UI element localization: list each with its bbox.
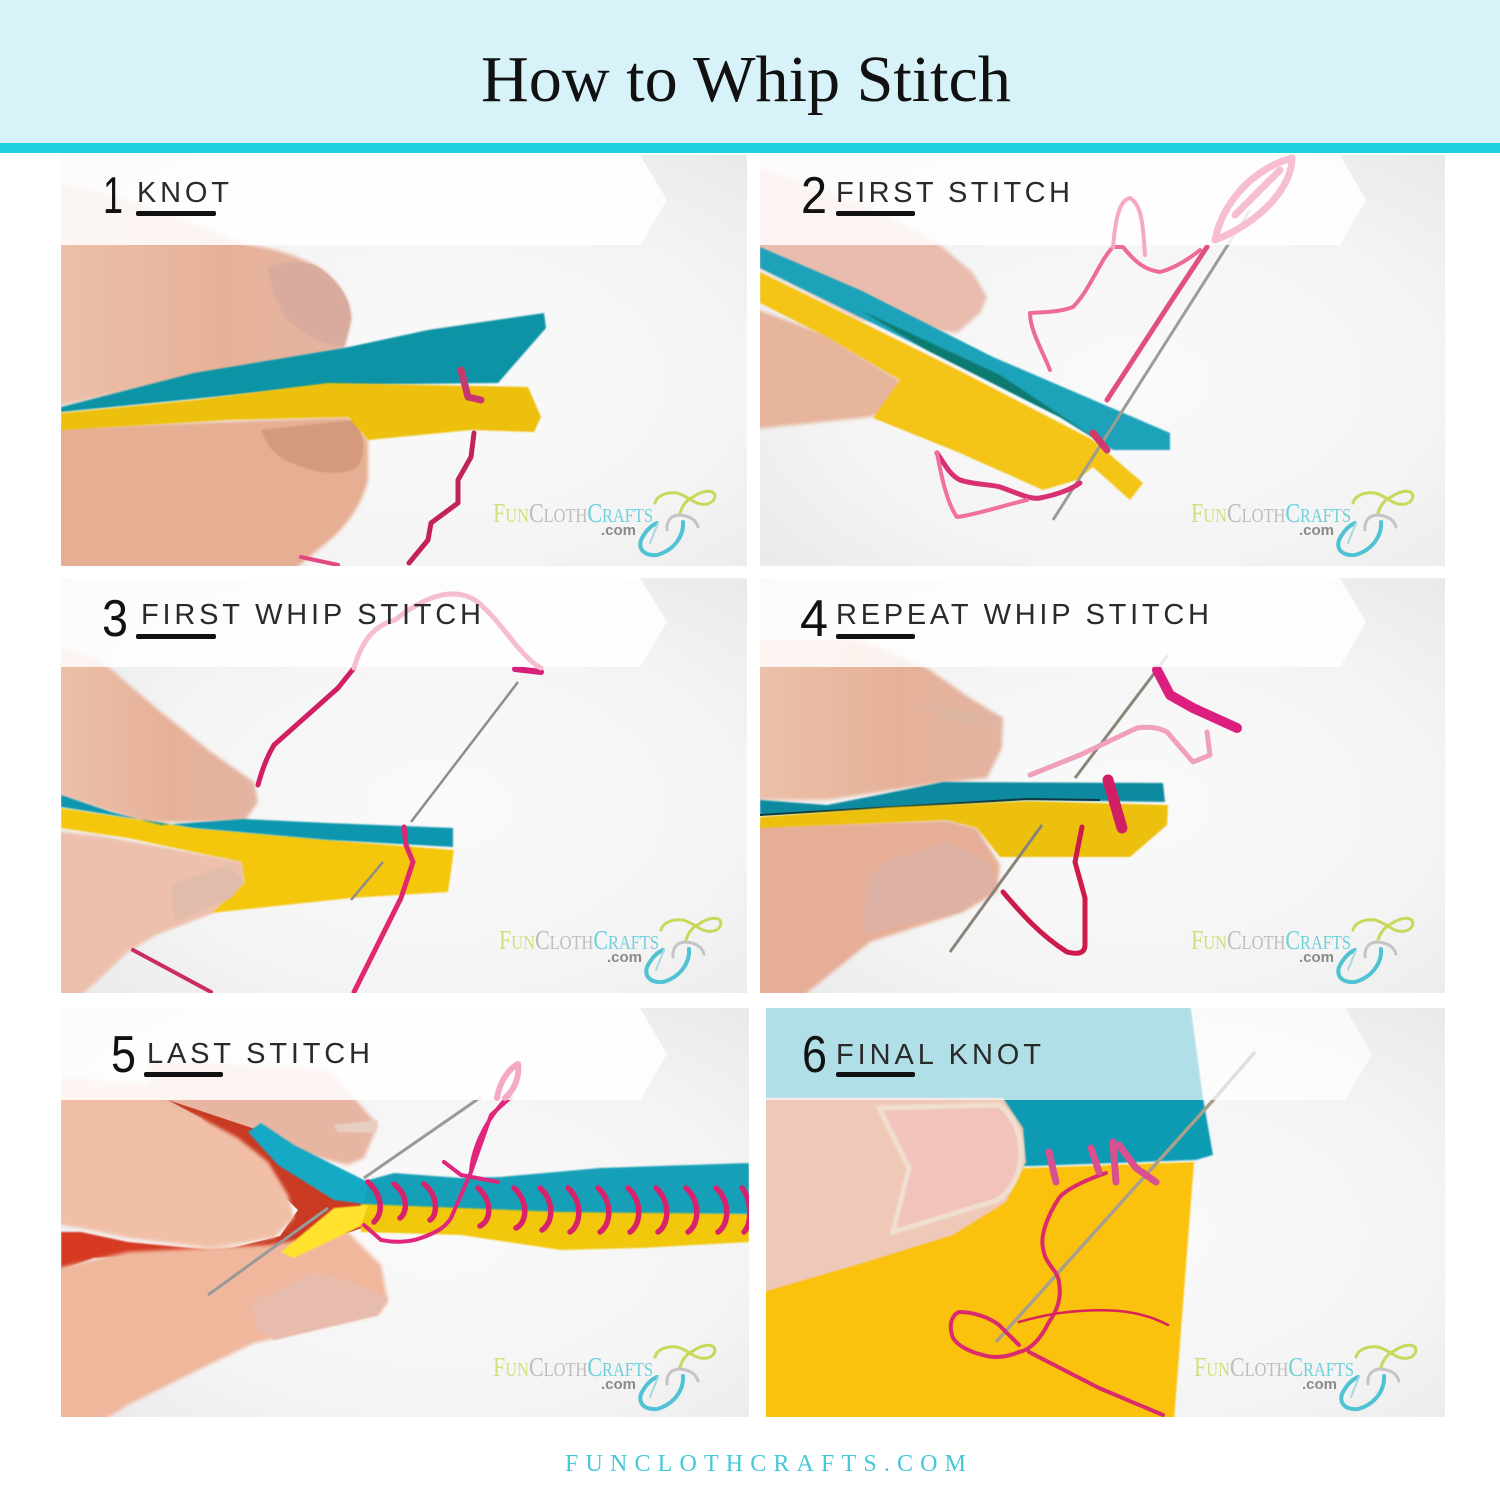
logo 4: .com (1299, 949, 1334, 966)
back fingernail (333, 1120, 378, 1133)
logo 2 (1191, 491, 1413, 555)
top finger (40, 180, 351, 410)
needle (351, 682, 518, 900)
logo 4: FUNCLOTHCRAFTS (1191, 925, 1351, 955)
panel: step 5 last stitch (40, 1008, 750, 1420)
upper finger (745, 640, 1003, 800)
thumb (750, 1098, 1026, 1296)
teal felt (760, 247, 1170, 450)
upper finger (61, 648, 260, 824)
lower finger (40, 1232, 388, 1420)
thread (364, 1097, 511, 1242)
logo 2: .com (1299, 522, 1334, 539)
logo 5: .com (601, 1376, 636, 1393)
lower fingernail (863, 842, 997, 935)
red shadow (168, 1100, 372, 1256)
underline (836, 634, 915, 639)
banner 3 (61, 578, 667, 667)
upper fingernail (921, 704, 1002, 724)
logo 6: .com (1302, 1376, 1337, 1393)
red band (61, 1232, 268, 1270)
thumb (40, 1075, 294, 1248)
underline (136, 211, 216, 216)
yellow end (281, 1205, 368, 1258)
number 2: 2 (801, 167, 827, 225)
label final knot: FINAL KNOT (836, 1039, 1041, 1071)
underline (136, 634, 216, 639)
needle (208, 1097, 481, 1295)
needle (950, 655, 1168, 952)
lower finger tip over felt (128, 842, 246, 934)
teal felt (760, 1003, 1213, 1166)
panel: step 6 final knot (750, 1003, 1445, 1420)
lower finger (61, 830, 244, 993)
thread over banner 5 (497, 1064, 518, 1098)
number 6: 6 (802, 1026, 827, 1084)
logo 1: .com (601, 522, 636, 539)
panel: step 3 first whip stitch (40, 578, 747, 996)
logo 6: FUNCLOTHCRAFTS (1194, 1352, 1354, 1382)
banner 5 (61, 1008, 667, 1100)
yellow felt (760, 272, 1143, 500)
number 3: 3 (102, 590, 128, 648)
logo 4 (1191, 918, 1413, 982)
label last stitch: LAST STITCH (147, 1038, 370, 1070)
needle (1053, 210, 1250, 520)
thread (461, 370, 481, 400)
teal strip (361, 1163, 749, 1214)
thumb (760, 308, 900, 430)
number 4: 4 (800, 590, 828, 648)
thread (1030, 727, 1210, 775)
needle (996, 1052, 1255, 1342)
banner 4 (760, 578, 1366, 667)
underline (836, 211, 915, 216)
logo 2: FUNCLOTHCRAFTS (1191, 498, 1351, 528)
label first whip stitch: FIRST WHIP STITCH (141, 599, 481, 631)
teal felt (61, 313, 546, 412)
footer url: FUNCLOTHCRAFTS.COM (565, 1451, 966, 1477)
label first stitch: FIRST STITCH (836, 177, 1070, 209)
stitches (368, 1182, 750, 1232)
lower fingernail (251, 1272, 388, 1340)
thread (951, 1173, 1106, 1357)
title: How to Whip Stitch (481, 43, 1011, 116)
lower finger (745, 820, 1000, 996)
thread (258, 668, 354, 785)
felt shadow (760, 799, 1100, 815)
teal end (248, 1123, 368, 1204)
number 1: 1 (103, 167, 123, 225)
yellow strip (361, 1202, 749, 1250)
lower fingernail (261, 420, 363, 473)
top fingernail (268, 262, 351, 347)
banner 6 (766, 1008, 1372, 1100)
label knot: KNOT (137, 177, 229, 209)
felt shadow (862, 310, 1093, 439)
thread over banner 3 (354, 594, 541, 668)
panel: step 2 first stitch (745, 155, 1445, 566)
yellow felt (61, 808, 454, 913)
logo 1: FUNCLOTHCRAFTS (493, 498, 653, 528)
logo 5 (493, 1345, 715, 1409)
yellow felt (61, 383, 541, 440)
underline (836, 1072, 915, 1077)
logo 1 (493, 491, 715, 555)
yellow felt (760, 801, 1168, 857)
back finger (150, 1060, 378, 1165)
logo 5: FUNCLOTHCRAFTS (493, 1352, 653, 1382)
yellow felt (760, 1162, 1194, 1420)
logo 3: .com (607, 949, 642, 966)
banner 1 (61, 155, 667, 245)
logo 6 (1194, 1345, 1416, 1409)
thread (1030, 247, 1200, 370)
label repeat whip stitch: REPEAT WHIP STITCH (836, 599, 1209, 631)
logo 3: FUNCLOTHCRAFTS (499, 925, 659, 955)
teal felt (760, 782, 1165, 815)
thumbnail (879, 1105, 1021, 1232)
fingernail (171, 865, 244, 922)
underline (144, 1072, 223, 1077)
finger (745, 165, 987, 333)
teal felt (61, 795, 453, 847)
banner 2 (760, 155, 1366, 245)
header band (0, 0, 1500, 153)
lower finger (40, 417, 368, 570)
logo 3 (499, 918, 721, 982)
panel: step 1 knot (40, 155, 747, 570)
thread over banner 2 (1113, 158, 1292, 255)
number 5: 5 (111, 1026, 136, 1084)
panel: step 4 repeat whip stitch (745, 578, 1445, 996)
